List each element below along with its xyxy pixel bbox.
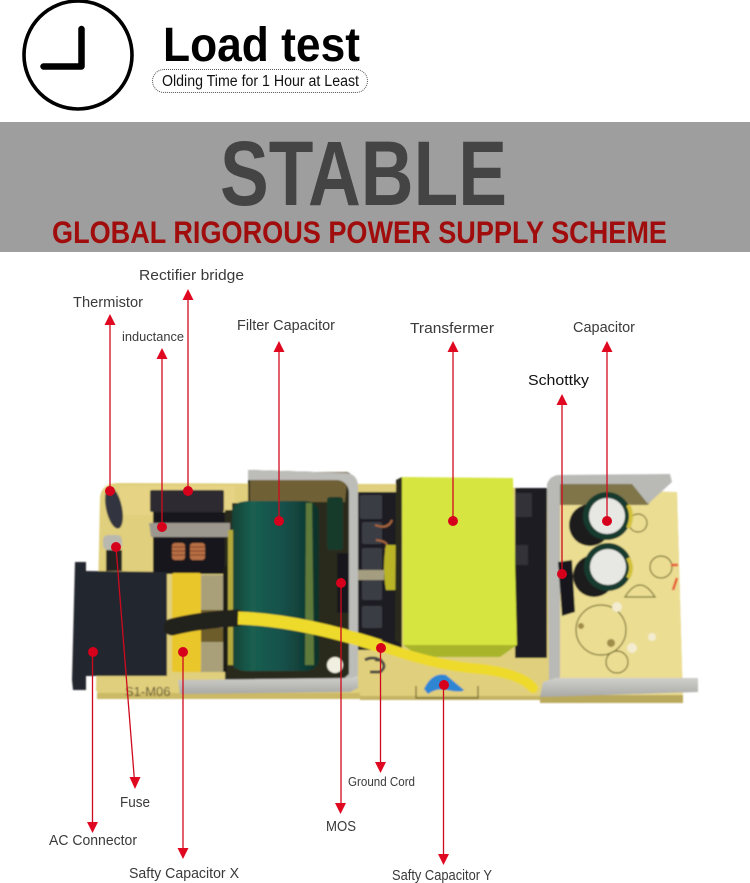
callout: capacitor [573, 320, 635, 526]
subheading: power supply scheme: GLOBAL RIGOROUS POWER SUPPLY SCHEME [52, 214, 667, 250]
callout: safety capacitor x [129, 647, 239, 882]
callout: fuse [111, 542, 150, 811]
callout: ground cord [348, 643, 415, 789]
left heatsink front [178, 470, 358, 694]
transformer [395, 477, 517, 657]
thermistor [102, 486, 126, 530]
safety capacitor x [172, 573, 201, 672]
icon: clock [24, 1, 132, 109]
capacitors [569, 492, 632, 597]
circuit board [96, 483, 683, 703]
callout: mos [326, 578, 356, 835]
callout: ac connector [49, 647, 137, 849]
filter capacitor [223, 497, 352, 673]
subtitle pill: Olding Time for 1 Hour at Least [162, 73, 360, 90]
callout: ground cord: Ground Cord [348, 775, 415, 789]
callout: transformer [410, 321, 494, 526]
callout: transformer: Transfermer [410, 321, 494, 337]
callout: thermistor [73, 295, 143, 496]
callout: inductance: inductance [122, 330, 184, 344]
callout: fuse: Fuse [120, 795, 150, 811]
panel: stable banner [0, 122, 750, 252]
callout: rectifier bridge [139, 268, 244, 496]
schottky [558, 560, 575, 616]
right heatsink [540, 474, 698, 697]
left heatsink back [225, 470, 350, 680]
callout: safety capacitor x: Safty Capacitor X [129, 866, 239, 882]
callout: schottky [528, 373, 590, 579]
ac connector [72, 562, 167, 690]
callout: filter capacitor: Filter Capacitor [237, 318, 335, 334]
fuse [103, 535, 122, 571]
callout: inductance [122, 330, 184, 532]
callout: safety capacitor y [392, 680, 492, 883]
callout: rectifier bridge: Rectifier bridge [139, 268, 244, 284]
ground cord [172, 618, 533, 688]
callout: ac connector: AC Connector [49, 833, 137, 849]
rectifier bridge [150, 490, 224, 512]
heading: load test: Load test [163, 19, 360, 72]
middle components [358, 488, 547, 658]
circuit board: S1-M06 [125, 684, 171, 699]
panel: power supply board photo [72, 470, 698, 703]
heading: stable: STABLE [220, 123, 507, 225]
callout: filter capacitor [237, 318, 335, 526]
callout: schottky: Schottky [528, 373, 590, 389]
panel: load test header [24, 1, 368, 109]
callout: thermistor: Thermistor [73, 295, 143, 311]
callout: capacitor: Capacitor [573, 320, 635, 336]
safety capacitor y [424, 675, 464, 694]
inductance [149, 512, 230, 574]
callout: mos: MOS [326, 819, 356, 835]
subtitle pill [152, 70, 368, 92]
